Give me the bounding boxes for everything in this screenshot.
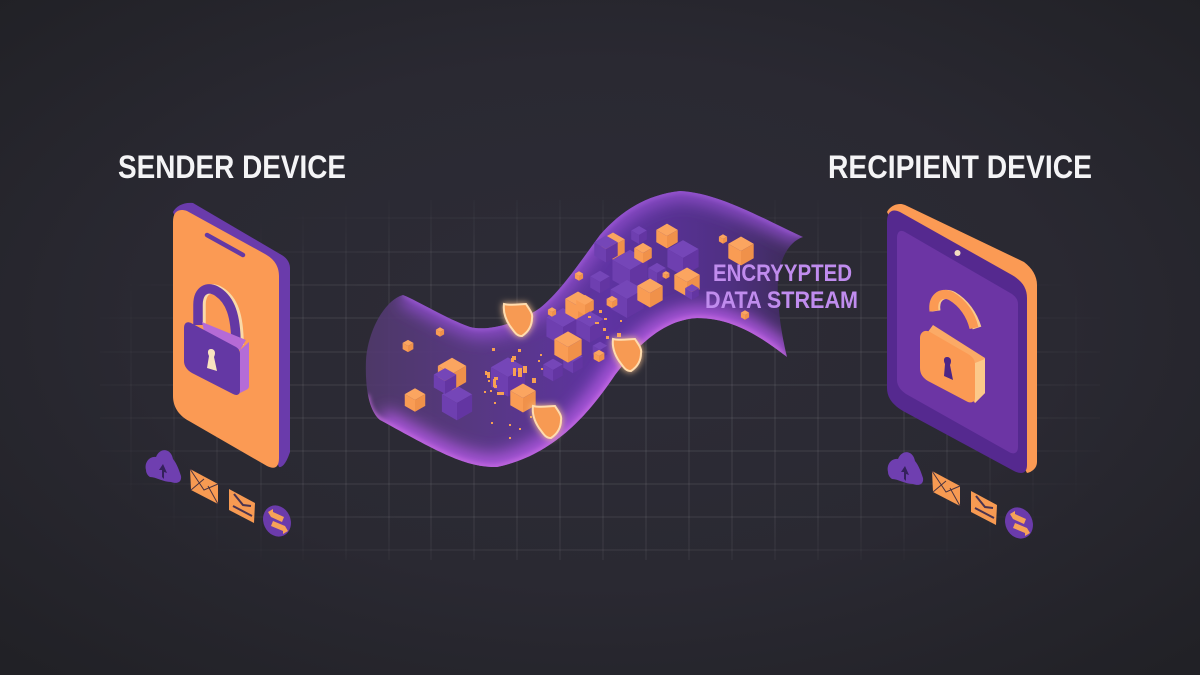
open padlock: [920, 294, 985, 403]
stream label: DATA STREAM: [705, 287, 858, 314]
phone front face: [173, 210, 279, 468]
stream label: [705, 260, 858, 314]
tablet camera: [954, 250, 960, 256]
data stream ribbon: [366, 191, 803, 467]
recipient small icons: [888, 452, 1038, 543]
heading: sender device: SENDER DEVICE: [118, 149, 346, 185]
sender small icons: [146, 450, 296, 541]
tablet side wall: [887, 204, 1037, 473]
data cubes: [403, 224, 754, 420]
background grid: [100, 200, 1100, 560]
heading: recipient device: RECIPIENT DEVICE: [828, 149, 1092, 185]
phone side wall: [173, 203, 290, 467]
tablet screen: [897, 231, 1018, 453]
recipient tablet: [887, 204, 1037, 473]
sender phone: [173, 203, 290, 468]
closed padlock: [184, 289, 249, 395]
phone speaker slot: [207, 235, 243, 255]
particle fragments: [484, 310, 622, 439]
security shields: [504, 304, 641, 438]
stream label: ENCRYYPTED: [713, 260, 852, 287]
tablet front frame: [887, 210, 1027, 473]
